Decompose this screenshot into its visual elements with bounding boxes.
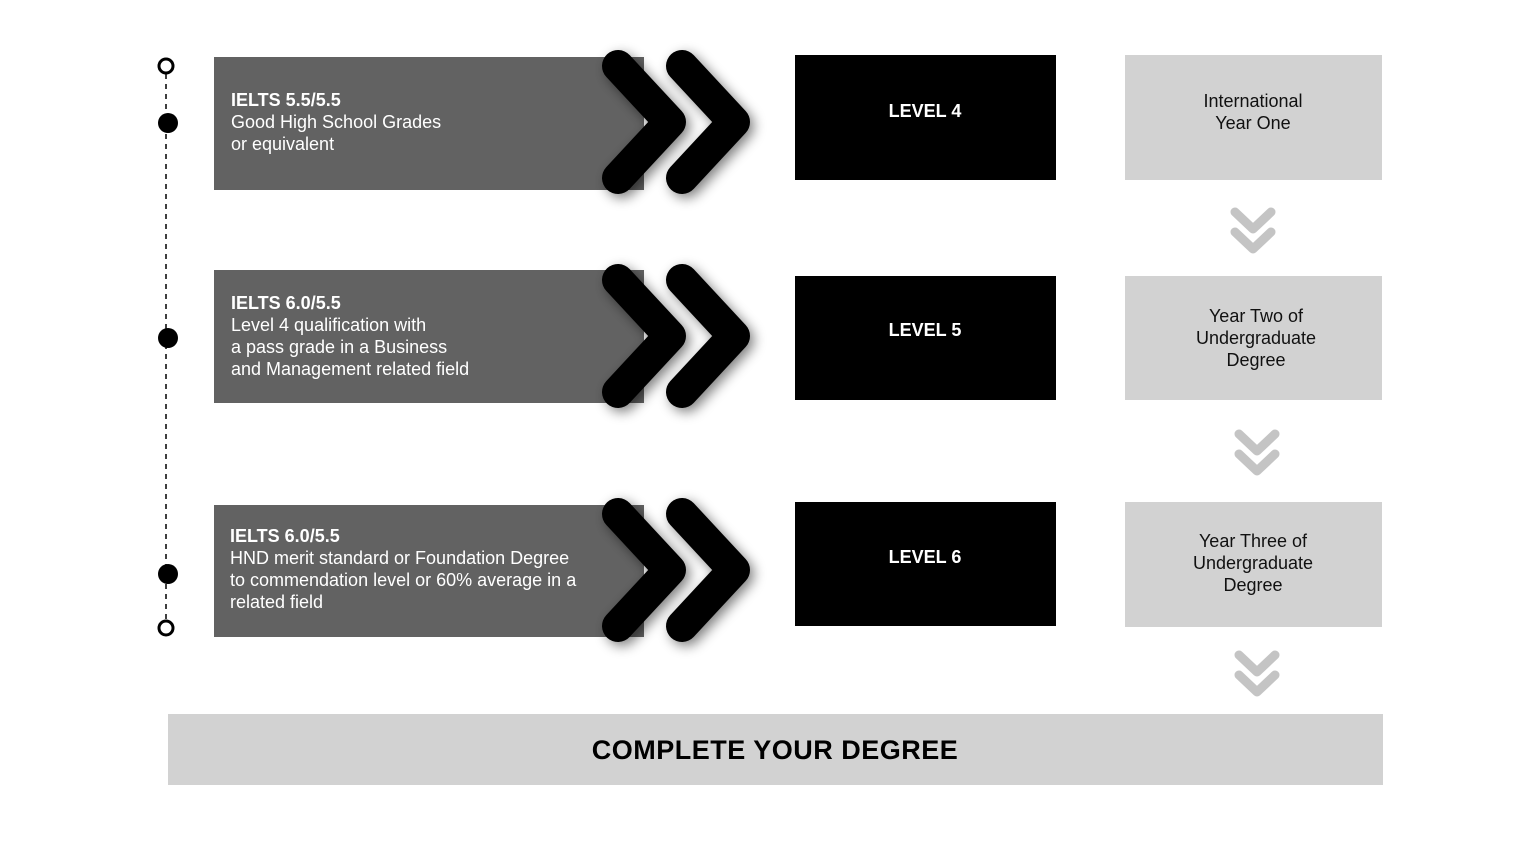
panel: row 3 requirement: to commendation level or 60% average in a (230, 570, 577, 590)
panel: row 1 requirement: IELTS 5.5/5.5 (231, 90, 341, 110)
panel: row 2 requirement (214, 270, 644, 403)
year two box: Year Two of (1209, 306, 1304, 326)
panel: row 2 requirement: IELTS 6.0/5.5 (231, 293, 341, 313)
panel: row 2 requirement: a pass grade in a Business (231, 337, 447, 357)
year three box: Year Three of (1199, 531, 1308, 551)
arrow: down 2 (1239, 434, 1275, 471)
year one box (1125, 55, 1382, 180)
level 5 box: LEVEL 5 (889, 320, 961, 340)
panel: row 3 requirement: HND merit standard or Foundation Degree (230, 548, 569, 568)
level 6 box: LEVEL 6 (889, 547, 961, 567)
arrow: row 3 chevrons (618, 514, 734, 626)
year two box: Undergraduate (1196, 328, 1316, 348)
arrow: row 1 chevrons (618, 66, 734, 178)
bottom banner (168, 714, 1383, 785)
year three box: Undergraduate (1193, 553, 1313, 573)
year one box: Year One (1215, 113, 1291, 133)
panel: row 3 requirement: IELTS 6.0/5.5 (230, 526, 340, 546)
panel: row 3 requirement (214, 505, 644, 637)
level 4 box: LEVEL 4 (889, 101, 961, 121)
panel: row 2 requirement: Level 4 qualification with (231, 315, 426, 335)
panel: row 1 requirement: Good High School Grades (231, 112, 441, 132)
level 6 box (795, 502, 1056, 626)
level 4 box (795, 55, 1056, 180)
year three box (1125, 502, 1382, 627)
year two box (1125, 276, 1382, 400)
level 5 box (795, 276, 1056, 400)
panel: row 2 requirement: and Management related field (231, 359, 469, 379)
panel: row 1 requirement: or equivalent (231, 134, 334, 154)
panel: row 3 requirement: related field (230, 592, 323, 612)
year two box: Degree (1226, 350, 1286, 370)
arrow: row 2 chevrons (618, 280, 734, 392)
year three box: Degree (1223, 575, 1283, 595)
timeline (158, 59, 178, 635)
arrow: down 3 (1239, 655, 1275, 692)
year one box: International (1203, 91, 1303, 111)
panel: row 1 requirement (214, 57, 644, 190)
arrow: down 1 (1235, 212, 1271, 249)
bottom banner: COMPLETE YOUR DEGREE (592, 735, 958, 765)
